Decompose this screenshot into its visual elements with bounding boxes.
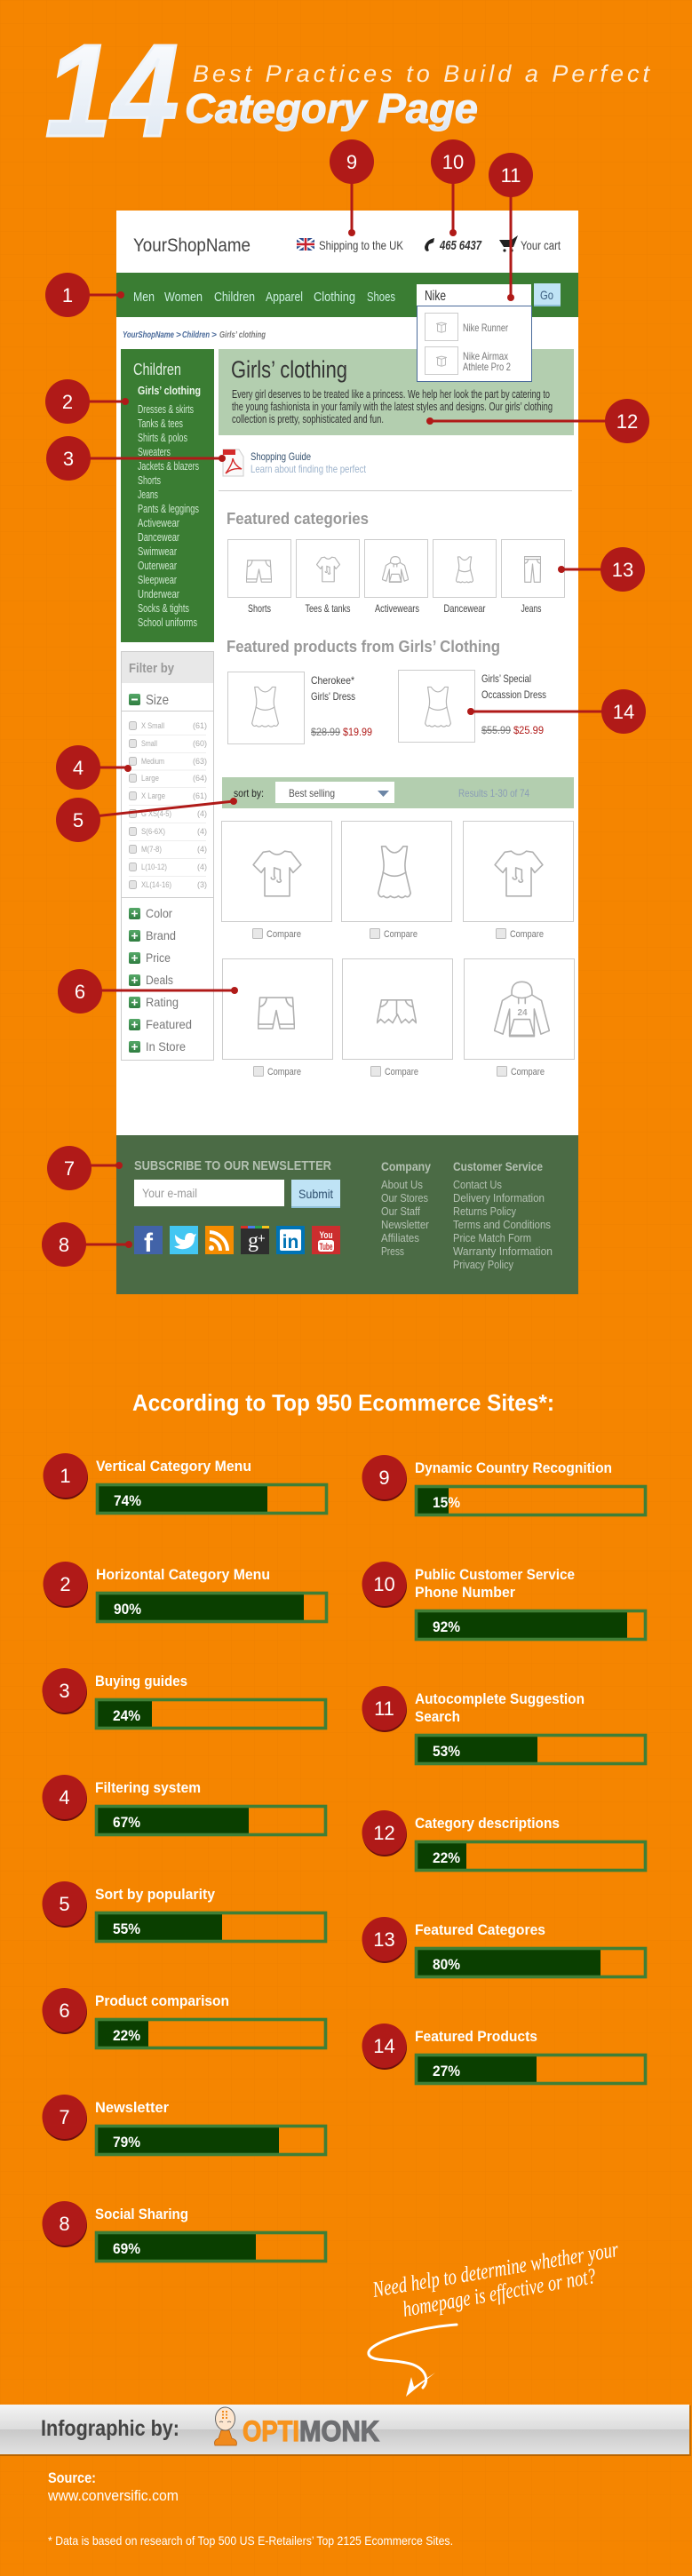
filter panel: In Store [146, 1039, 186, 1053]
marker 10: 10 [442, 151, 464, 173]
stat 4: Filtering system [95, 1779, 201, 1796]
cart: Your cart [521, 238, 561, 252]
company links: Press [381, 1244, 404, 1258]
filter panel: (3) [197, 880, 207, 889]
vertical category menu: Jeans [138, 488, 158, 501]
breadcrumb: > [176, 330, 181, 340]
marker 10 [431, 139, 475, 236]
customer service links: Warranty Information [453, 1244, 553, 1258]
stat 11: Autocomplete Suggestion [415, 1690, 585, 1707]
filter panel: (4) [197, 827, 207, 836]
stat 9: Dynamic Country Recognition [415, 1459, 612, 1476]
stat 8: Social Sharing [95, 2206, 188, 2222]
stat 1: 74% [114, 1492, 141, 1509]
breadcrumb [123, 330, 266, 340]
marker 2 [45, 379, 129, 424]
category description panel: Girls’ clothing [231, 356, 347, 383]
icon: OptiMonk monk mascot [215, 2407, 236, 2445]
footnote: * Data is based on research of Top 500 US E-Retailers’ Top 2125 Ecommerce Sites. [48, 2533, 453, 2548]
stat 8: 8 [59, 2213, 70, 2235]
source: www.conversific.com [47, 2487, 179, 2504]
stat 14 [362, 2023, 645, 2084]
stat 2: 2 [60, 1573, 71, 1595]
stat 14: Featured Products [415, 2028, 537, 2045]
filter panel: (61) [193, 721, 207, 730]
vertical category menu: Jackets & blazers [138, 459, 199, 473]
stat 6: Product comparison [95, 1992, 229, 2009]
stat 1 [43, 1453, 327, 1514]
featured products [227, 638, 546, 744]
category description panel: collection is pretty, sophisticated and fun. [232, 412, 384, 425]
filter panel: S(6-6X) [141, 827, 165, 836]
filter panel: G XS(4-5) [141, 809, 171, 818]
marker 13 [558, 547, 645, 592]
product grid with compare: 24 [517, 1008, 528, 1018]
social icons: + [258, 1231, 266, 1246]
stat 7: 79% [113, 2134, 140, 2151]
vertical category menu: Sweaters [138, 445, 171, 458]
stat 10 [362, 1562, 645, 1640]
newsletter form: Submit [298, 1187, 333, 1201]
product grid with compare: Compare [266, 929, 301, 940]
breadcrumb: Children [182, 330, 210, 340]
stat 13 [362, 1917, 645, 1977]
stat 14: 27% [433, 2063, 460, 2079]
title main line: Category Page [185, 85, 478, 131]
marker 1 [45, 273, 124, 317]
stat 11: 53% [433, 1743, 460, 1760]
stat 13: 80% [433, 1956, 460, 1973]
featured products: $25.99 [513, 724, 544, 736]
stat 5: Sort by popularity [95, 1886, 215, 1903]
marker 13: 13 [612, 559, 633, 581]
social icons: g [248, 1229, 259, 1252]
filter panel [121, 652, 213, 1061]
stat 7 [43, 2095, 325, 2155]
featured categories: Shorts [248, 602, 271, 615]
vertical category menu: Dresses & skirts [138, 402, 194, 416]
stat 4 [43, 1775, 325, 1835]
stat 9: 9 [378, 1467, 390, 1489]
title [45, 18, 650, 164]
social icons [134, 1226, 340, 1258]
stat 3: 3 [59, 1680, 70, 1702]
featured products: Cherokee* [311, 674, 354, 687]
social icons: You [320, 1230, 332, 1241]
stat 2: Horizontal Category Menu [96, 1566, 270, 1583]
search box with autocomplete: Athlete Pro 2 [463, 361, 511, 373]
stat 8 [43, 2201, 325, 2262]
sort bar: Best selling [289, 787, 335, 799]
filter panel: Brand [146, 928, 176, 942]
customer service links: Contact Us [453, 1178, 502, 1191]
sort bar [222, 777, 574, 808]
vertical category menu: Swimwear [138, 545, 177, 558]
featured products: $55.99 [481, 724, 511, 736]
stat 3: 24% [113, 1707, 140, 1724]
search box with autocomplete: Nike [425, 289, 446, 304]
vertical category menu: Shirts & polos [138, 431, 187, 444]
marker 11: 11 [501, 164, 521, 187]
social icons: f [144, 1228, 154, 1258]
vertical category menu: Activewear [138, 516, 179, 529]
vertical category menu: Outerwear [138, 559, 177, 572]
horizontal category menu: Shoes [367, 290, 395, 305]
category description panel: the young fashionista in your family with the latest styles and designs. Our girls’ clothing [232, 400, 553, 413]
vertical category menu: Underwear [138, 587, 179, 600]
stat 9: 15% [433, 1494, 460, 1511]
stat 11 [362, 1686, 645, 1764]
stat 13: Featured Categores [415, 1921, 545, 1938]
filter panel: Price [146, 950, 171, 965]
search box with autocomplete: Nike Runner [463, 322, 508, 334]
OptiMonk wordmark: MONK [299, 2415, 379, 2447]
OptiMonk wordmark [243, 2415, 379, 2447]
filter panel: Small [141, 739, 157, 748]
stat 12 [362, 1810, 645, 1871]
marker 9 [330, 139, 374, 236]
shipping indicator with UK flag: Shipping to the UK [319, 238, 404, 252]
marker 7 [47, 1146, 123, 1190]
filter panel: (60) [193, 739, 207, 748]
marker 4 [56, 745, 131, 790]
vertical category menu: Sleepwear [138, 573, 177, 586]
marker 14: 14 [613, 701, 634, 723]
handwritten callout: homepage is effective or not? [401, 2264, 598, 2322]
vertical category menu: School uniforms [138, 616, 197, 629]
stat 7: Newsletter [95, 2099, 169, 2116]
featured categories: Activewears [375, 602, 419, 615]
customer service links: Delivery Information [453, 1191, 545, 1205]
stat 6: 22% [113, 2027, 140, 2044]
arrow [369, 2325, 457, 2397]
filter panel: (4) [197, 845, 207, 854]
filter panel: X Small [141, 721, 164, 730]
search box with autocomplete [417, 283, 561, 382]
stat 11: 11 [374, 1697, 394, 1720]
horizontal category menu: Women [164, 290, 203, 305]
horizontal category menu [116, 273, 578, 317]
stat 8: 69% [113, 2240, 140, 2257]
stat 10: 92% [433, 1618, 460, 1635]
marker 11 [489, 153, 533, 301]
stat 5 [43, 1881, 325, 1942]
product grid with compare: Compare [267, 1067, 301, 1077]
vertical category menu: Children [133, 361, 181, 378]
stat 4: 67% [113, 1814, 140, 1831]
breadcrumb: YourShopName [123, 330, 174, 340]
breadcrumb: Girls’ clothing [219, 330, 266, 340]
sort bar: Results 1-30 of 74 [458, 787, 529, 799]
company links: Affiliates [381, 1231, 419, 1244]
marker 1: 1 [62, 284, 73, 306]
filter panel: Rating [146, 995, 179, 1009]
category description panel: Every girl deserves to be treated like a princess. We help her look the part by catering to [232, 387, 550, 401]
marker 5 [56, 798, 237, 842]
stat 9 [362, 1455, 645, 1515]
stat 10: Public Customer Service [415, 1566, 575, 1583]
vertical category menu: Girls’ clothing [138, 384, 201, 397]
filter panel: XL(14-16) [141, 880, 171, 889]
marker 3: 3 [63, 448, 74, 470]
filter panel: Large [141, 774, 159, 783]
filter panel: (61) [193, 791, 207, 800]
stats: right column [362, 1455, 645, 2084]
filter panel: (64) [193, 774, 207, 783]
marker 12: 12 [616, 410, 638, 433]
horizontal category menu: Clothing [314, 290, 355, 305]
panel: example shop page [116, 211, 578, 1294]
stat 1: 1 [60, 1465, 71, 1487]
stat 12: 12 [373, 1822, 395, 1844]
featured products: $28.99 [311, 726, 340, 738]
filter panel: Color [146, 906, 172, 920]
customer service links: Returns Policy [453, 1205, 516, 1218]
featured categories: Dancewear [444, 602, 485, 615]
company links: Our Stores [381, 1191, 428, 1205]
category description panel [219, 349, 574, 435]
marker 2: 2 [62, 391, 73, 413]
vertical category menu: Pants & leggings [138, 502, 199, 515]
company links: About Us [381, 1178, 423, 1191]
callout markers [42, 139, 649, 1267]
subtitle: Best Practices to Build a Perfect [193, 60, 650, 87]
company links: Company [381, 1159, 431, 1173]
cart [499, 235, 561, 252]
stat 12: 22% [433, 1849, 460, 1866]
credit banner [0, 2405, 691, 2456]
customer service links: Customer Service [453, 1159, 543, 1173]
featured products: Occassion Dress [481, 688, 546, 701]
filter panel: (63) [193, 757, 207, 766]
vertical category menu: Dancewear [138, 530, 179, 544]
product grid with compare [222, 821, 574, 1077]
newsletter form: SUBSCRIBE TO OUR NEWSLETTER [134, 1158, 331, 1173]
filter panel: M(7-8) [141, 845, 162, 854]
shop name: YourShopName [133, 235, 251, 256]
featured products: Girls' Dress [311, 690, 355, 703]
marker 7: 7 [64, 1157, 75, 1180]
featured products: Girls’ Special [481, 672, 531, 685]
phone number: 465 6437 [439, 238, 481, 253]
marker 5: 5 [73, 809, 84, 831]
handwritten callout [370, 2238, 620, 2322]
buying guide [223, 449, 367, 476]
stat 4: 4 [59, 1786, 70, 1809]
featured categories: Jeans [521, 602, 542, 615]
customer service links [453, 1159, 553, 1271]
product grid with compare: Compare [511, 1067, 545, 1077]
marker 6: 6 [75, 981, 85, 1003]
filter panel: L(10-12) [141, 863, 167, 871]
phone number [425, 238, 481, 253]
product grid with compare: Compare [384, 929, 418, 940]
customer service links: Terms and Conditions [453, 1218, 551, 1231]
filter panel: (4) [197, 809, 207, 818]
horizontal category menu: Apparel [266, 290, 303, 305]
search box with autocomplete: Nike Airmax [463, 350, 508, 362]
source: Source: [48, 2469, 96, 2486]
marker 12 [426, 399, 649, 443]
company links [381, 1159, 431, 1258]
stat 5: 5 [59, 1893, 70, 1915]
company links: Our Staff [381, 1205, 420, 1218]
filter panel: X Large [141, 791, 165, 800]
horizontal category menu: Children [214, 290, 255, 305]
stat 3 [43, 1668, 325, 1729]
vertical category menu: Socks & tights [138, 601, 189, 615]
featured categories: Featured categories [227, 510, 369, 528]
search box with autocomplete: Go [540, 288, 553, 302]
newsletter form [134, 1158, 340, 1208]
customer service links: Price Match Form [453, 1231, 531, 1244]
stat 6: 6 [59, 2000, 70, 2022]
filter panel: Featured [146, 1017, 192, 1031]
stat 14: 14 [373, 2035, 395, 2057]
featured products: $19.99 [343, 726, 372, 738]
vertical category menu [121, 349, 214, 642]
filter panel: (4) [197, 863, 207, 871]
social icons: Tube [320, 1242, 332, 1252]
marker 8: 8 [59, 1234, 69, 1256]
big number 14: 14 [45, 18, 179, 164]
stat 6 [43, 1988, 325, 2048]
marker 14 [467, 689, 646, 734]
horizontal category menu: Men [133, 290, 155, 305]
stat 2: 90% [114, 1601, 141, 1618]
sort bar: sort by: [234, 787, 264, 799]
buying guide: Shopping Guide [251, 450, 311, 463]
stat 7: 7 [59, 2106, 70, 2128]
marker 3 [46, 436, 226, 481]
stat 5: 55% [113, 1920, 140, 1937]
vertical category menu: Shorts [138, 473, 161, 487]
marker 4: 4 [73, 757, 84, 779]
newsletter form: Your e-mail [142, 1186, 197, 1200]
stats heading: According to Top 950 Ecommerce Sites*: [132, 1389, 554, 1416]
credit banner: Infographic by: [41, 2416, 179, 2441]
stat 3: Buying guides [95, 1673, 187, 1690]
stat 11: Search [415, 1708, 460, 1725]
stat 10: Phone Number [415, 1584, 515, 1601]
source [47, 2469, 179, 2504]
filter panel: Deals [146, 973, 173, 987]
stat 10: 10 [373, 1573, 395, 1595]
stat 1: Vertical Category Menu [96, 1458, 251, 1475]
footer [116, 1135, 578, 1294]
filter panel: Medium [141, 757, 164, 766]
filter panel: Size [146, 693, 169, 708]
product grid with compare: Compare [385, 1067, 418, 1077]
handwritten callout: Need help to determine whether your [370, 2238, 620, 2302]
OptiMonk wordmark: OPTI [243, 2415, 299, 2447]
featured categories [227, 510, 565, 615]
vertical category menu: Tanks & tees [138, 417, 183, 430]
featured products: Featured products from Girls’ Clothing [227, 638, 500, 656]
stat 2 [43, 1562, 327, 1622]
marker 8 [42, 1222, 132, 1267]
stats: left column [43, 1453, 327, 2262]
product grid with compare: Compare [510, 929, 544, 940]
filter panel: Filter by [129, 661, 175, 676]
marker 6 [58, 969, 238, 1014]
breadcrumb: > [211, 330, 217, 340]
stat 13: 13 [373, 1928, 395, 1951]
customer service links: Privacy Policy [453, 1258, 513, 1271]
marker 9: 9 [346, 151, 357, 173]
company links: Newsletter [381, 1218, 430, 1231]
stat 12: Category descriptions [415, 1815, 560, 1832]
buying guide: Learn about finding the perfect [251, 463, 367, 475]
featured categories: Tees & tanks [306, 602, 350, 615]
social icons: in [282, 1232, 298, 1252]
shipping indicator with UK flag [297, 238, 404, 252]
